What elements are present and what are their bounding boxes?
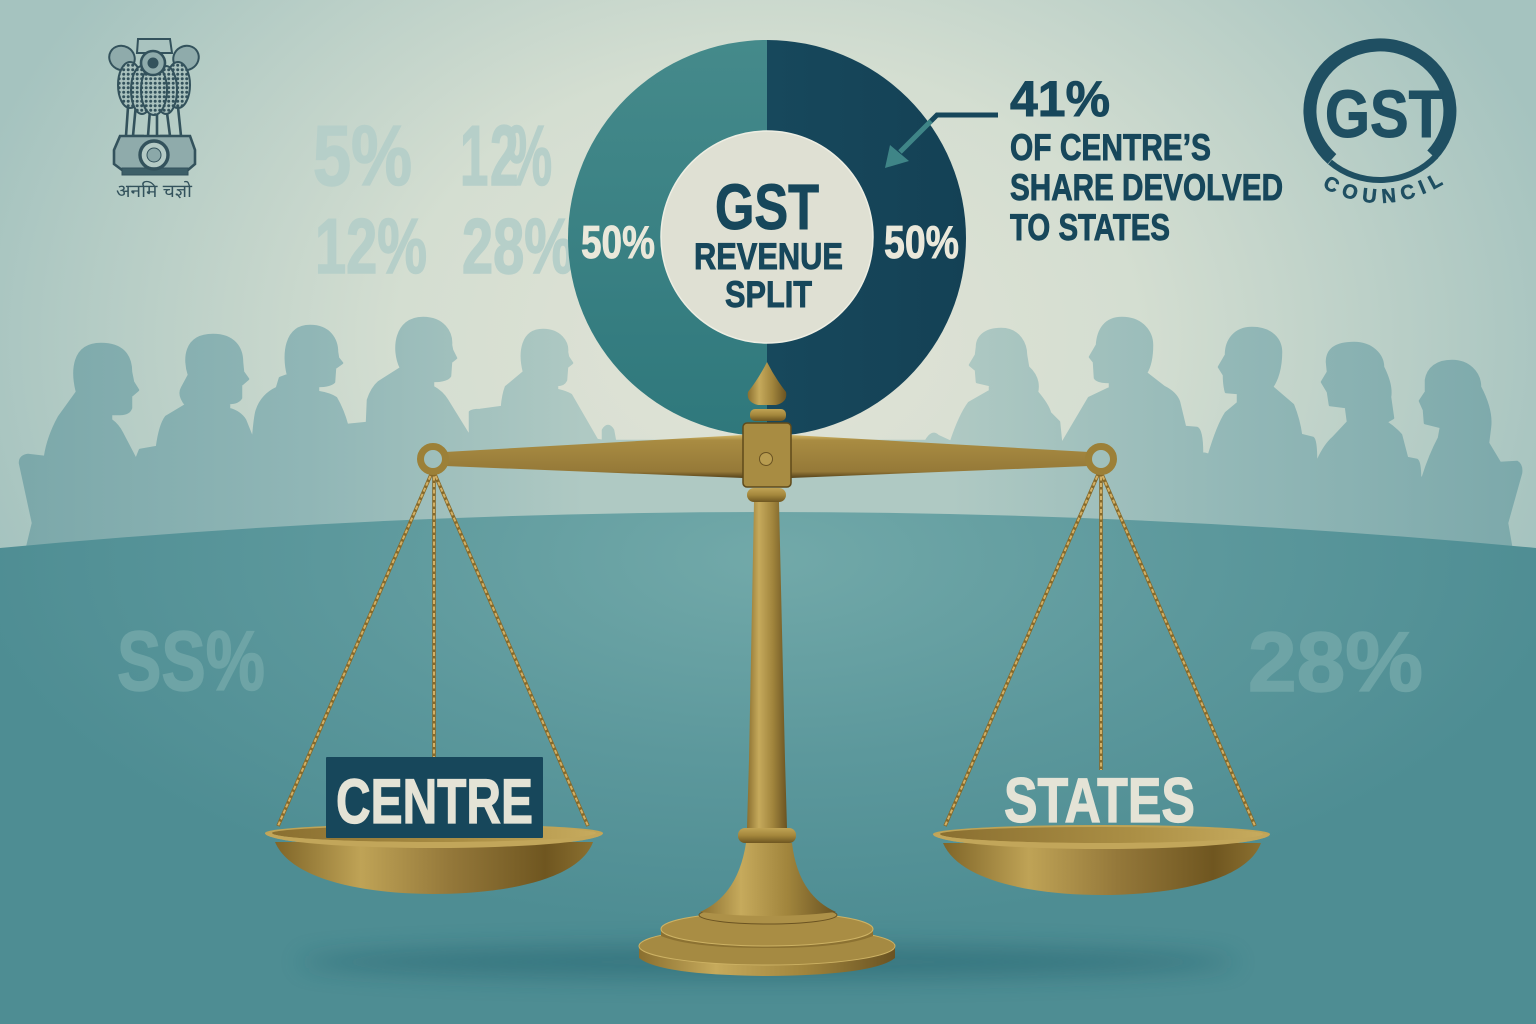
- watermark tax rates top left: [313, 109, 574, 290]
- emblem of India: [105, 39, 203, 175]
- watermark tax rates lower: 28%: [1248, 615, 1423, 709]
- watermark tax rates lower: SS%: [117, 614, 265, 708]
- right pan with States label: [933, 766, 1270, 895]
- watermark tax rates top left: 12%: [315, 202, 427, 290]
- scale finial and pivot block: [743, 362, 791, 502]
- callout: 41 percent devolved: 41%: [1010, 71, 1110, 127]
- scale column: [738, 502, 796, 843]
- donut chart: revenue split: REVENUE: [694, 236, 843, 277]
- watermark tax rates top left: 28%: [462, 202, 574, 290]
- table surface: [0, 512, 1536, 1024]
- donut chart: revenue split: [568, 40, 966, 436]
- callout: 41 percent devolved: SHARE DEVOLVED: [1010, 167, 1283, 208]
- GST Council logo: COUNCIL: [1324, 175, 1444, 204]
- watermark tax rates top left: 12%: [460, 109, 552, 203]
- GST Council logo: [1303, 38, 1456, 204]
- council member silhouettes and table band: [20, 318, 1521, 552]
- left pan with Centre label: [265, 757, 603, 894]
- donut chart: revenue split: 50%: [884, 216, 959, 268]
- scale base: [639, 843, 895, 976]
- left pan ropes: [278, 470, 588, 826]
- Centre label: [326, 757, 543, 838]
- donut chart: revenue split: SPLIT: [725, 274, 812, 315]
- donut chart: revenue split: GST: [715, 171, 819, 243]
- callout: 41 percent devolved: TO STATES: [1010, 207, 1170, 248]
- right pan ropes: [945, 470, 1255, 826]
- emblem motto: अनमि चज्ञो: [116, 180, 192, 201]
- ground shadow: [298, 945, 1238, 979]
- watermark tax rates top left: 5%: [313, 109, 412, 204]
- States label: STATES: [1004, 766, 1195, 836]
- callout arrow: [885, 115, 998, 168]
- GST Council logo: GST: [1325, 77, 1444, 152]
- watermark tax rates lower: [117, 614, 1423, 709]
- callout: 41 percent devolved: OF CENTRE’S: [1010, 127, 1211, 168]
- scale beam: [420, 435, 1114, 478]
- donut chart: revenue split: 50%: [581, 216, 655, 268]
- callout: 41 percent devolved: [1010, 71, 1283, 248]
- Centre label: CENTRE: [336, 767, 533, 837]
